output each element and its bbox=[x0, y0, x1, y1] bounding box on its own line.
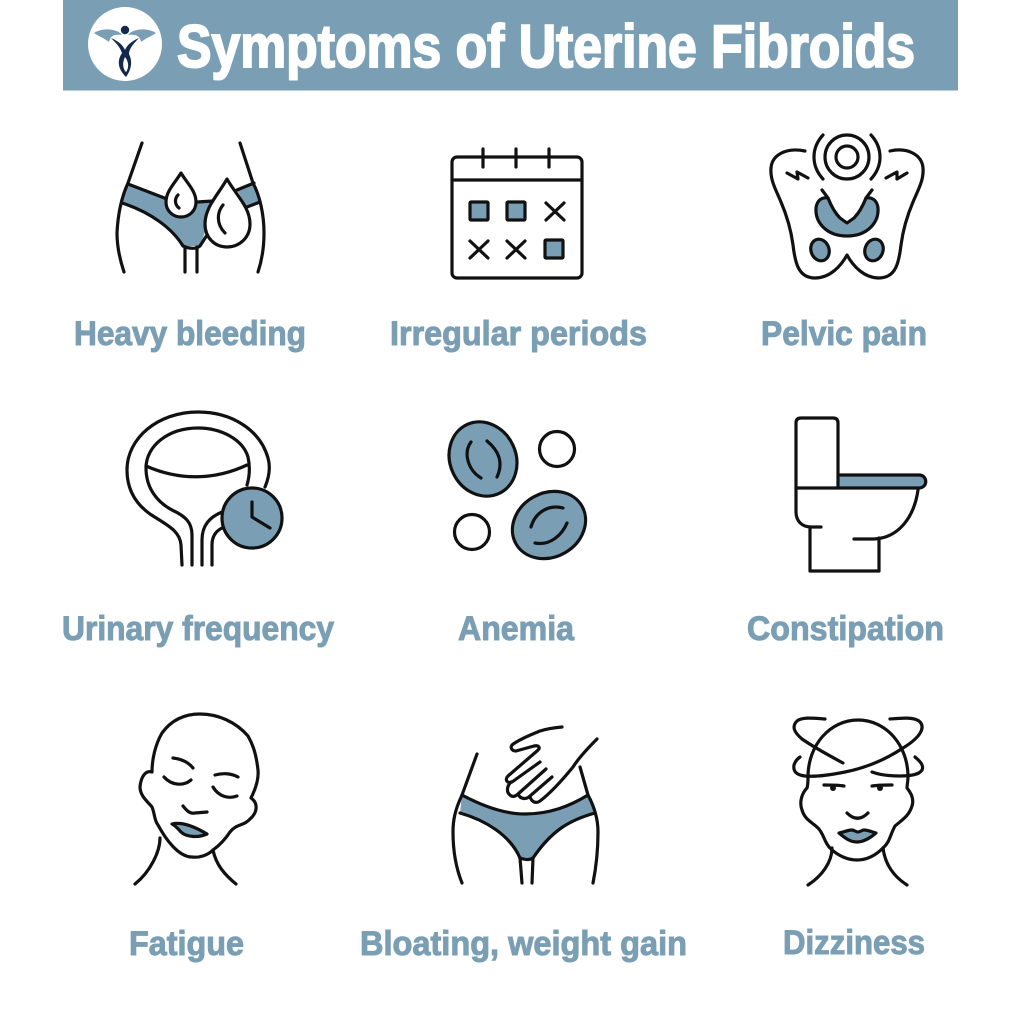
icon: abdomen with hand bbox=[453, 727, 598, 883]
label: Urinary frequency bbox=[62, 610, 334, 648]
label: Anemia bbox=[458, 610, 575, 648]
label: Constipation bbox=[747, 610, 944, 648]
label: Heavy bleeding bbox=[74, 315, 306, 353]
panel: anemia bbox=[437, 411, 598, 648]
icon: blood cells bbox=[437, 411, 598, 572]
label: Irregular periods bbox=[390, 315, 647, 353]
panel: dizziness bbox=[783, 718, 925, 962]
label: Pelvic pain bbox=[761, 315, 927, 353]
icon: bladder with clock bbox=[127, 412, 282, 565]
label: Fatigue bbox=[129, 925, 244, 963]
panel: heavy bleeding bbox=[74, 143, 306, 353]
icon: underwear with blood drops bbox=[117, 143, 264, 272]
label: Dizziness bbox=[783, 924, 925, 962]
panel: urinary frequency bbox=[62, 412, 334, 648]
icon: pelvis bbox=[771, 135, 923, 278]
panel: constipation bbox=[747, 418, 944, 648]
panel: fatigue bbox=[129, 714, 258, 963]
title: Symptoms of Uterine Fibroids bbox=[177, 13, 915, 80]
panel: irregular periods bbox=[390, 149, 647, 353]
icon: toilet bbox=[796, 418, 926, 571]
label: Bloating, weight gain bbox=[360, 925, 687, 963]
header banner bbox=[63, 0, 958, 90]
icon: tired face bbox=[135, 714, 258, 884]
panel: pelvic pain bbox=[761, 135, 927, 353]
icon: dizzy head bbox=[794, 718, 923, 885]
logo bbox=[88, 7, 162, 81]
panel: bloating, weight gain bbox=[360, 727, 687, 963]
icon: calendar bbox=[452, 149, 582, 278]
